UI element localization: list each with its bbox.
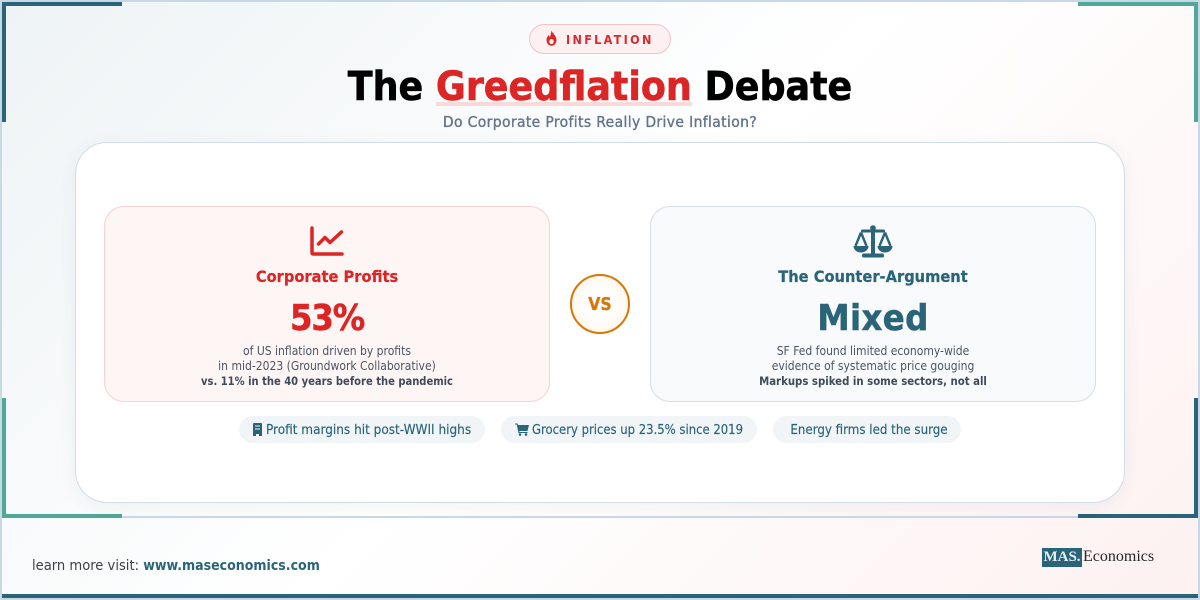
corner accent: top right [1078,2,1198,122]
icon: line chart [310,226,344,256]
big number: 53% [290,298,364,339]
chip: grocery prices [501,416,757,443]
description: evidence of systematic price gouging [772,359,974,373]
chip label: Energy firms led the surge [790,422,948,438]
panel: corporate profits [104,206,550,402]
vs label: VS [588,295,612,315]
chip label: Grocery prices up 23.5% since 2019 [532,422,743,438]
description: vs. 11% in the 40 years before the pandemic [201,375,453,388]
icon: building [253,423,262,436]
title: The Greedflation Debate [348,62,852,110]
card heading: The Counter-Argument [778,267,968,286]
logo mark: MAS. [1043,549,1081,565]
description: SF Fed found limited economy-wide [777,344,969,358]
bottom bar [2,594,1198,598]
corner accent: top left [2,2,122,122]
badge label: INFLATION [566,32,654,46]
main panel [75,142,1125,503]
icon: flame [546,30,556,46]
logo: MAS Economics [1042,548,1154,567]
divider line [2,516,1198,518]
chip: energy firms [773,416,961,443]
corner accent: bottom right [1078,398,1198,518]
logo wordmark: Economics [1083,548,1154,565]
chip label: Profit margins hit post-WWII highs [266,422,471,438]
corner accent: bottom left [2,398,122,518]
badge: inflation [529,24,671,54]
card heading: Corporate Profits [256,267,398,286]
subtitle: Do Corporate Profits Really Drive Inflation? [443,113,757,131]
chip: profit margins [239,416,485,443]
description: in mid-2023 (Groundwork Collaborative) [218,359,436,373]
icon: shopping cart [515,424,529,436]
description [201,344,453,388]
description [759,344,987,388]
description: Markups spiked in some sectors, not all [759,375,987,388]
big word: Mixed [817,298,929,339]
vs circle [570,274,630,334]
panel: counter-argument [650,206,1096,402]
icon: balance scale [854,225,892,258]
description: of US inflation driven by profits [243,344,411,358]
footer link: learn more visit: www.maseconomics.com [32,557,320,574]
